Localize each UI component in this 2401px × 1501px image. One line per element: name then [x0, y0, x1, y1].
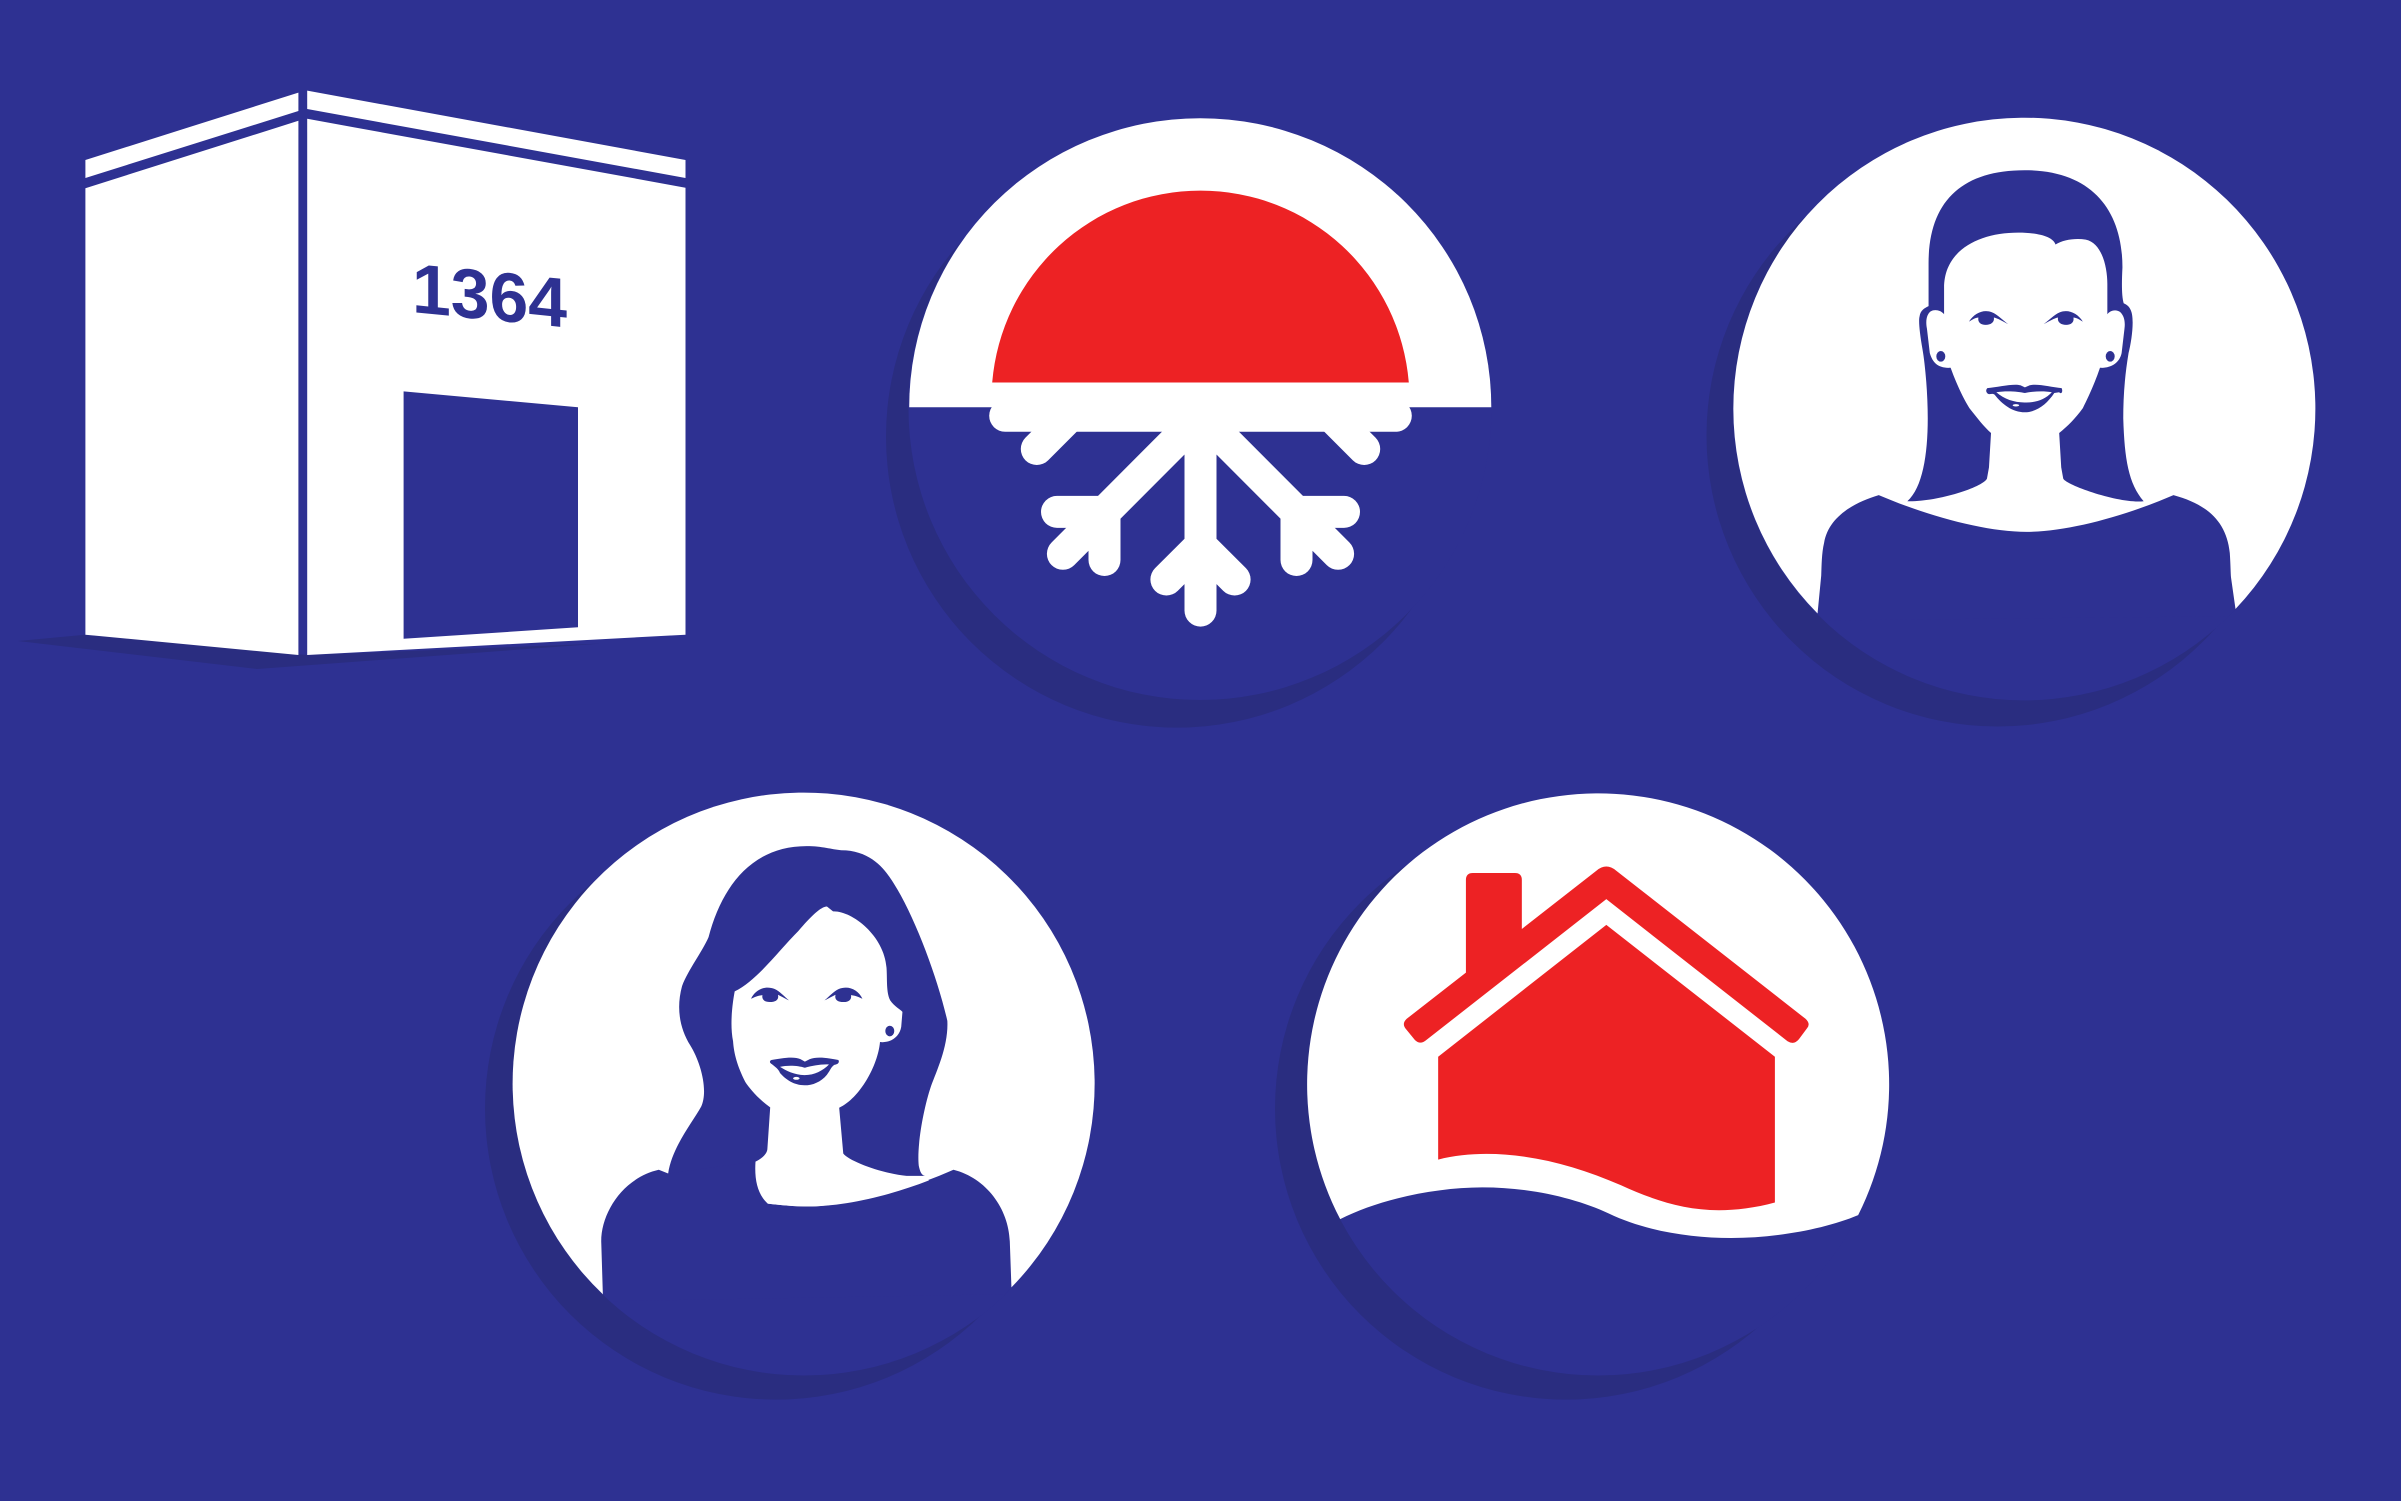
circle base — [908, 117, 1492, 700]
left wall — [85, 121, 298, 655]
portrait — [513, 793, 1095, 1301]
circle shadow — [886, 146, 1468, 728]
door — [404, 391, 578, 639]
right earring — [2106, 351, 2115, 362]
white half circle — [909, 118, 1491, 407]
lip highlight — [2013, 404, 2019, 407]
face, neck and chest — [731, 907, 929, 1207]
snowflake — [1005, 416, 1396, 611]
house body — [1438, 925, 1775, 1210]
circle base — [1733, 118, 2315, 700]
icon: heating and cooling — [886, 117, 1492, 728]
circle shadow — [1706, 144, 2288, 726]
face and neck — [1926, 233, 2125, 494]
right eye — [2044, 311, 2083, 325]
right wall — [307, 119, 686, 655]
portrait — [1733, 118, 2315, 620]
circle base — [1307, 794, 1889, 1376]
left roof band — [85, 93, 298, 178]
body — [601, 1162, 1011, 1301]
circle shadow — [1275, 818, 1857, 1400]
icon: woman with straight hair — [1706, 118, 2315, 726]
teeth — [1996, 391, 2052, 402]
white disc — [513, 793, 1095, 1294]
left eye — [751, 988, 789, 1002]
mouth — [1986, 385, 2062, 412]
circle shadow — [485, 818, 1067, 1400]
mouth — [770, 1058, 839, 1085]
house artwork — [1307, 793, 1889, 1238]
circle base — [513, 794, 1095, 1376]
earring — [885, 1026, 894, 1036]
left eye — [1969, 311, 2008, 325]
icon: house — [1275, 793, 1889, 1400]
left earring — [1936, 351, 1945, 362]
icon: storage building — [18, 91, 686, 669]
teeth — [780, 1064, 829, 1075]
hair — [1907, 170, 2144, 502]
white disc — [1733, 118, 2315, 613]
body — [1818, 495, 2236, 620]
lip highlight — [793, 1077, 800, 1080]
roof and chimney — [1404, 867, 1809, 1043]
hair — [668, 846, 947, 1204]
building ground shadow — [18, 635, 600, 669]
icon: woman with long wavy hair — [485, 793, 1095, 1400]
building number: 1364 — [412, 248, 567, 342]
red half sun — [992, 191, 1409, 382]
white disc cut by wave — [1307, 793, 1889, 1238]
right roof band — [307, 91, 686, 178]
right eye — [824, 988, 862, 1002]
